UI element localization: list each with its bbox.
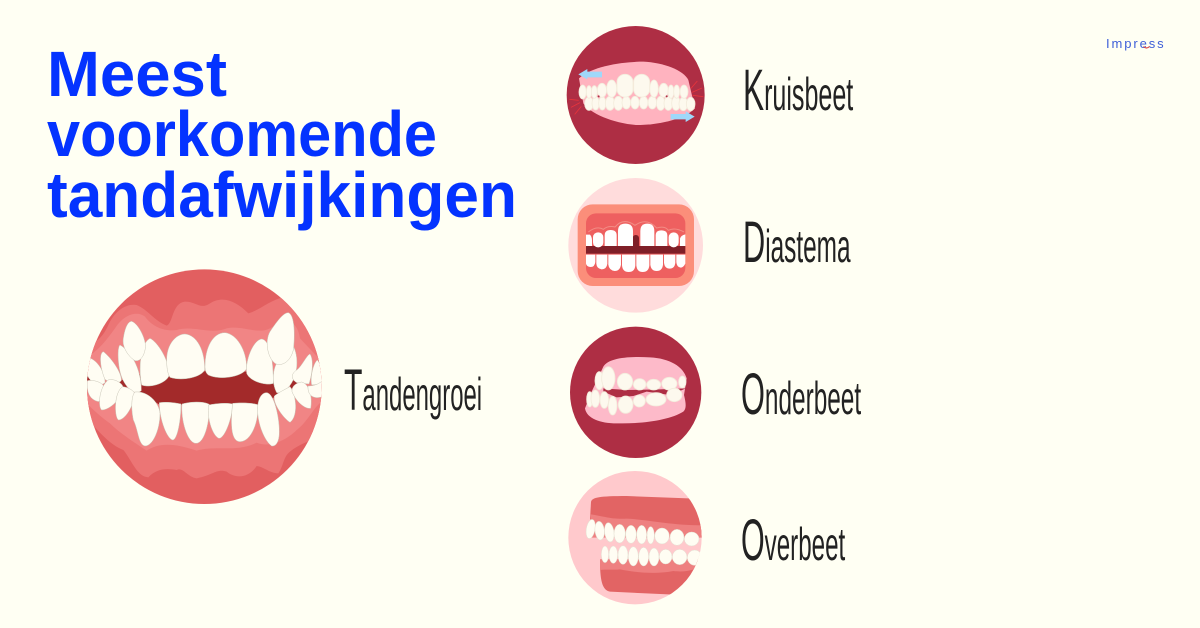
lower teeth: [586, 255, 685, 272]
title: tandafwijkingen: [47, 159, 517, 231]
panel: Onderbeet illustration: [570, 327, 701, 458]
upper gum line: [591, 514, 703, 538]
lower teeth: [585, 96, 695, 111]
circle background: [568, 178, 703, 313]
label: Diastema: Diastema: [743, 210, 851, 274]
upper teeth: [579, 74, 688, 99]
mouth gap: [603, 388, 686, 397]
inner gums: [586, 213, 685, 278]
gaps: [598, 95, 600, 97]
title: voorkomende: [47, 98, 437, 170]
lower teeth: [87, 379, 322, 446]
lower gums: [600, 559, 703, 596]
logo: Impress: Impress: [1106, 36, 1166, 51]
gum base: [83, 267, 327, 507]
lower teeth: [587, 388, 682, 415]
arrow: left: [578, 69, 602, 79]
title: [47, 38, 517, 231]
upper teeth: [595, 367, 686, 390]
outer frame: [578, 204, 694, 286]
dark bite band: [586, 246, 685, 254]
label: Tandengroei: Tandengroei: [344, 357, 482, 423]
label: Onderbeet: Onderbeet: [741, 362, 861, 426]
upper teeth: [585, 519, 699, 546]
panel: Kruisbeet illustration: [567, 26, 705, 164]
circle background: [567, 26, 705, 164]
upper teeth: [586, 224, 685, 247]
upper teeth: [87, 313, 322, 393]
lower teeth: [601, 546, 702, 566]
panel: Overbeet illustration: [568, 471, 703, 604]
panel: Diastema illustration: [568, 178, 703, 313]
title: Meest: [47, 38, 227, 110]
circle background: [568, 471, 702, 604]
panel: Tandengroei illustration: [83, 267, 327, 507]
label: Overbeet: Overbeet: [741, 507, 845, 573]
pain marks: [569, 81, 703, 114]
gums: [585, 357, 687, 423]
gum light layer: [83, 314, 327, 451]
gum mid layer: [83, 297, 327, 478]
upper gums: [590, 496, 703, 538]
label: Kruisbeet: Kruisbeet: [743, 58, 854, 122]
gums: [579, 62, 695, 125]
circle background: [570, 327, 701, 458]
tooth gap: [633, 235, 639, 248]
lower gum line: [600, 559, 703, 573]
mouth opening: [83, 370, 300, 405]
arrow: right: [671, 111, 695, 122]
gum line: [588, 222, 684, 232]
